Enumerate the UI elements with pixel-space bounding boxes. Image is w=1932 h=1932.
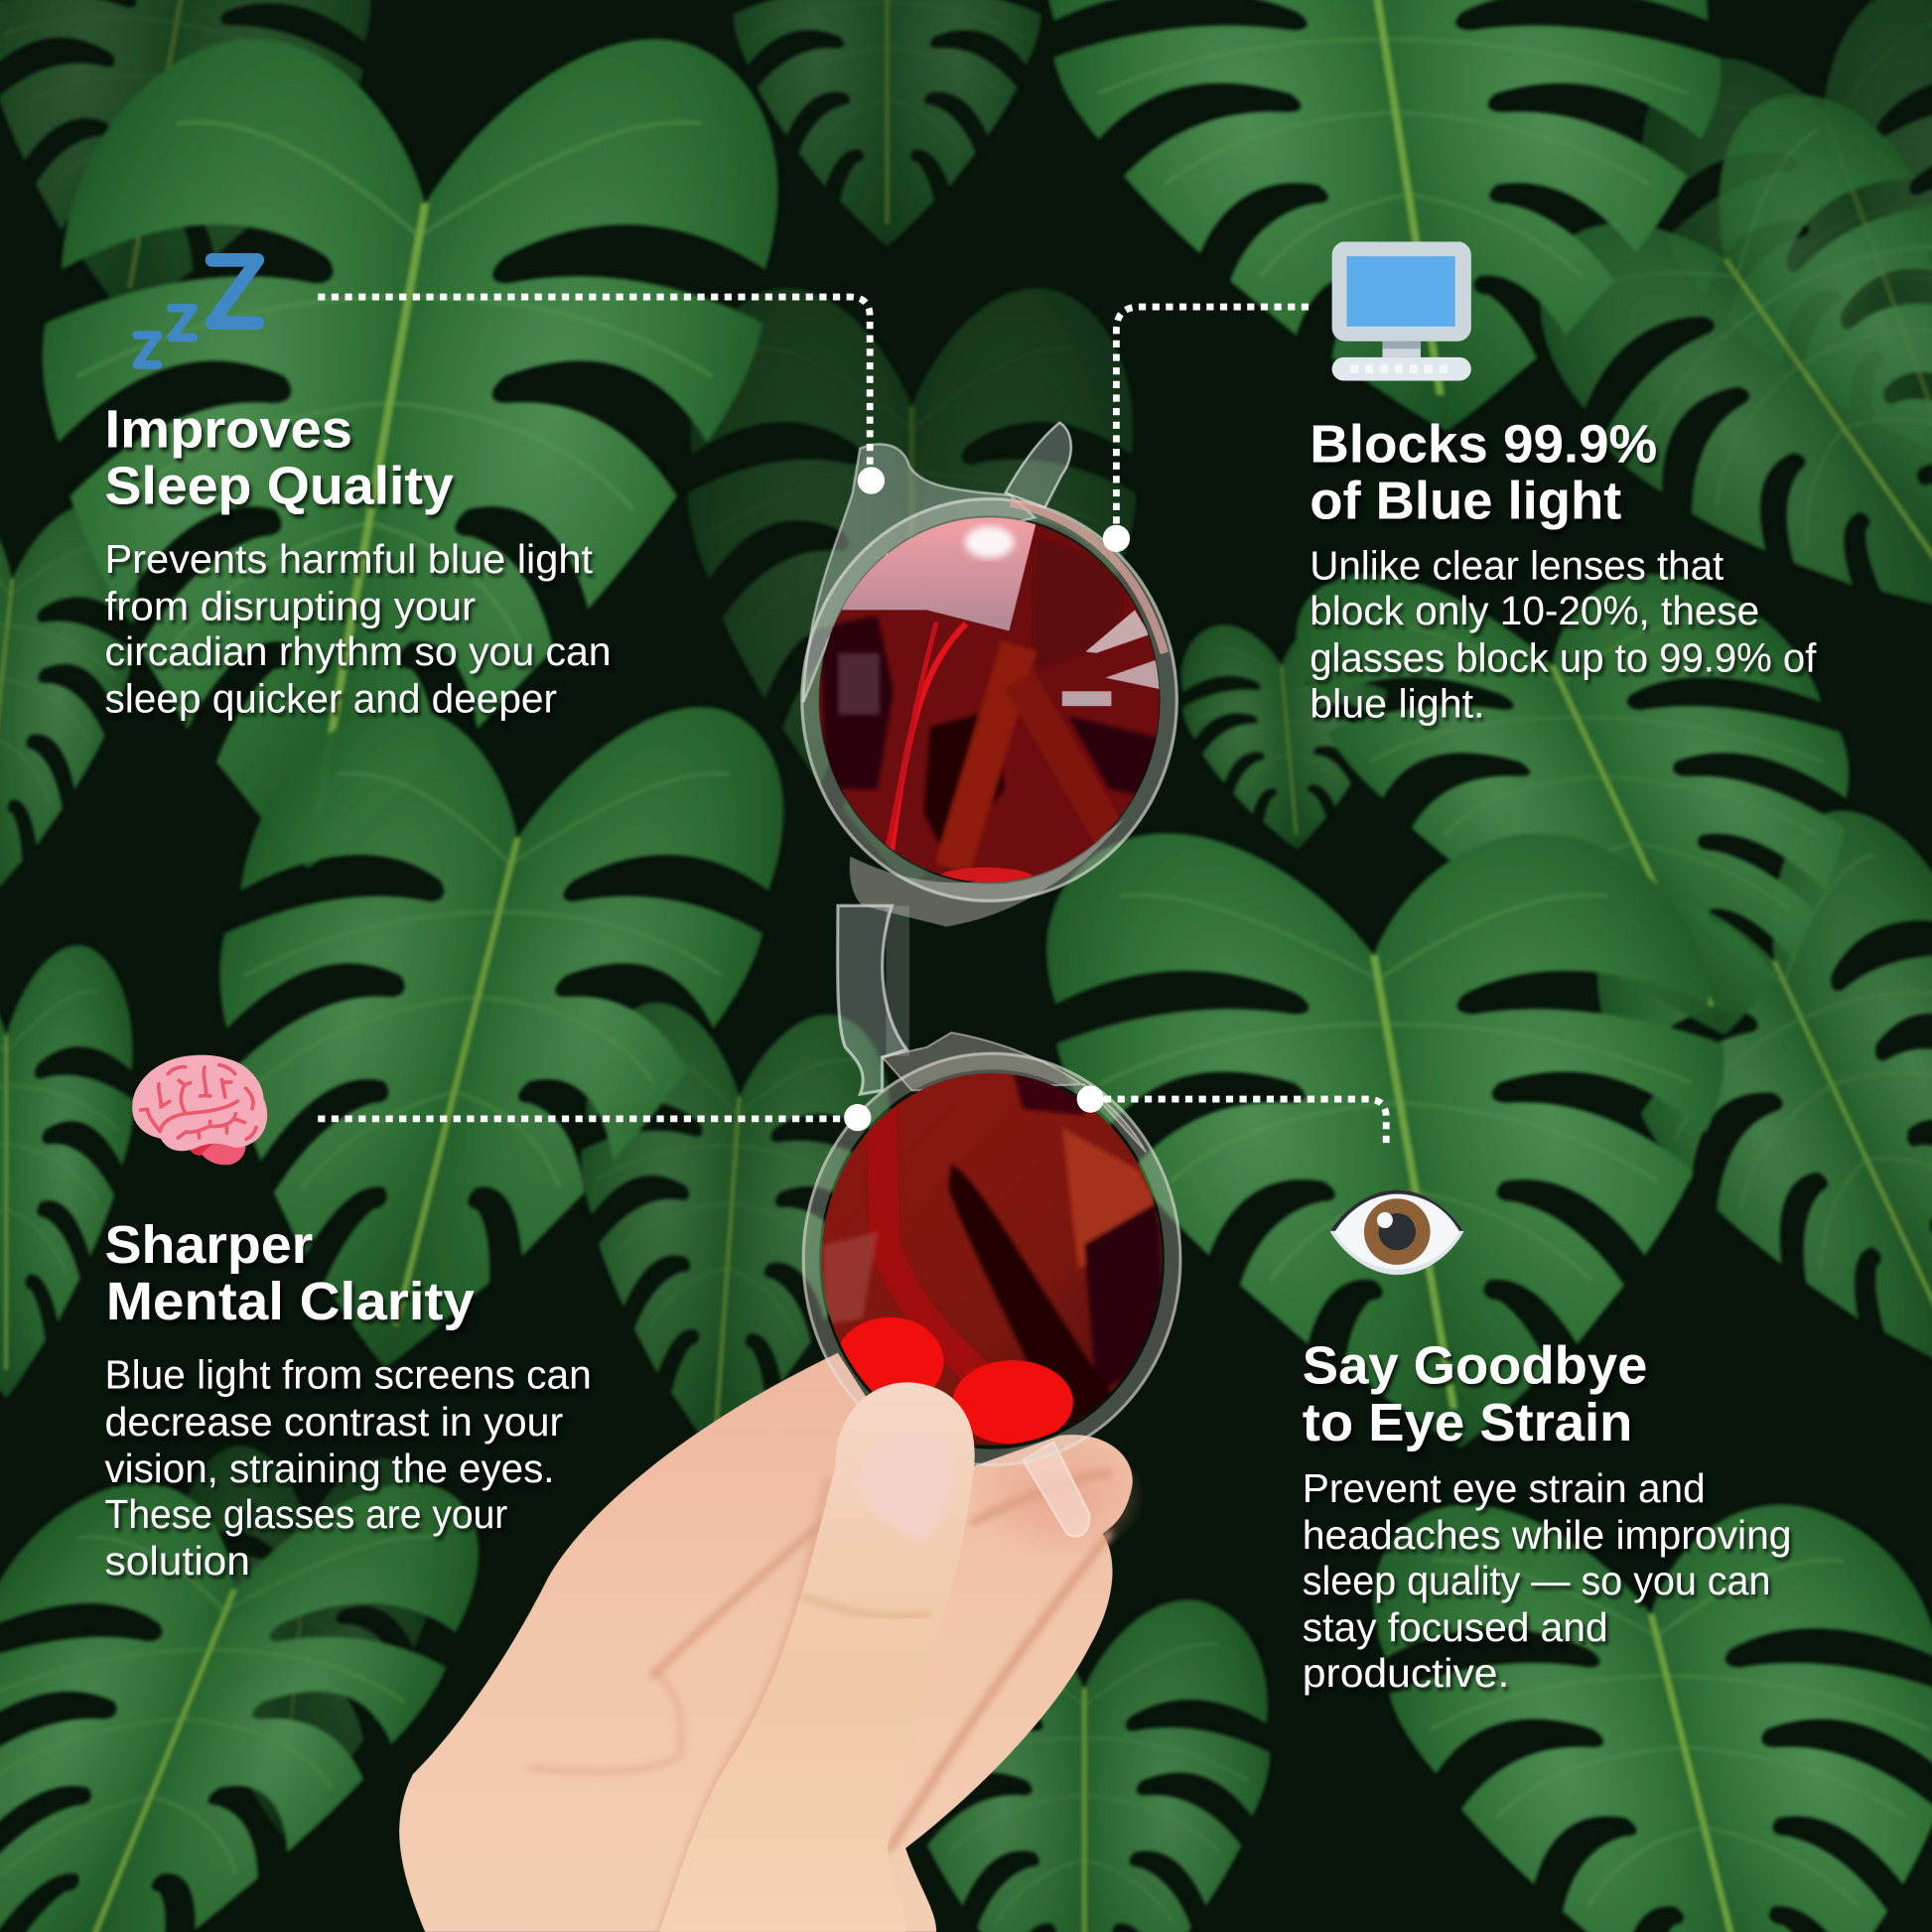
heading: sharper mental clarity: Sharper bbox=[104, 1216, 313, 1275]
body: mental clarity description bbox=[104, 1352, 592, 1584]
body: blue light description: glasses block up to 99.9% of bbox=[1310, 634, 1817, 680]
text block: blocks blue light bbox=[1310, 415, 1817, 726]
upper temple arm tip bbox=[1006, 423, 1071, 507]
heading: improves sleep quality bbox=[104, 401, 454, 516]
icon: sleeping zzz bbox=[137, 260, 257, 364]
body: sleep quality description: from disrupting your bbox=[104, 583, 476, 628]
glasses: upper lens bbox=[802, 444, 1176, 926]
body: eye strain description: Prevent eye strain and bbox=[1303, 1465, 1706, 1511]
connector dots bbox=[844, 467, 1130, 1131]
body: blue light description: Unlike clear lenses that bbox=[1310, 542, 1725, 588]
text block: improves sleep quality bbox=[104, 401, 612, 721]
body: mental clarity description: These glasses are your bbox=[104, 1491, 507, 1537]
connector: brain to frame bbox=[318, 1116, 858, 1122]
body: mental clarity description: Blue light from screens can bbox=[104, 1352, 592, 1398]
icon: computer monitor bbox=[1332, 241, 1471, 380]
body: sleep quality description: circadian rhythm so you can bbox=[104, 628, 612, 674]
body: sleep quality description: sleep quicker and deeper bbox=[104, 675, 557, 721]
glasses: lower lens bbox=[803, 1033, 1180, 1465]
heading: say goodbye to eye strain: to Eye Strain bbox=[1303, 1394, 1632, 1452]
body: eye strain description: stay focused and bbox=[1303, 1604, 1608, 1650]
body: mental clarity description: decrease contrast in your bbox=[104, 1399, 563, 1445]
body: sleep quality description bbox=[104, 536, 612, 721]
body: blue light description: blue light. bbox=[1310, 680, 1484, 726]
heading: say goodbye to eye strain bbox=[1303, 1337, 1647, 1452]
body: eye strain description: sleep quality — so you can bbox=[1303, 1558, 1770, 1603]
body: eye strain description: headaches while improving bbox=[1303, 1512, 1792, 1558]
icon: brain bbox=[132, 1055, 267, 1165]
body: mental clarity description: solution bbox=[104, 1538, 250, 1584]
text block: say goodbye to eye strain bbox=[1303, 1337, 1792, 1696]
body: sleep quality description: Prevents harmful blue light bbox=[104, 536, 594, 582]
body: eye strain description: productive. bbox=[1303, 1650, 1509, 1696]
heading: sharper mental clarity bbox=[104, 1216, 475, 1331]
body: blue light description: block only 10-20%, these bbox=[1310, 588, 1759, 633]
heading: blocks 99.9% of blue light bbox=[1310, 415, 1657, 530]
hand bbox=[399, 1353, 1146, 1932]
lower temple arm tip bbox=[1023, 1442, 1089, 1537]
connector: sleep to frame bbox=[318, 297, 870, 481]
connector: monitor to frame bbox=[1116, 307, 1309, 538]
heading: blocks 99.9% of blue light: of Blue light bbox=[1310, 472, 1621, 530]
connector: eye to frame bbox=[1090, 1099, 1386, 1146]
heading: improves sleep quality: Sleep Quality bbox=[104, 458, 454, 516]
heading: improves sleep quality: Improves bbox=[104, 401, 352, 460]
icon: eye bbox=[1330, 1189, 1463, 1275]
heading: sharper mental clarity: Mental Clarity bbox=[106, 1273, 475, 1331]
text block: sharper mental clarity bbox=[104, 1216, 592, 1584]
body: eye strain description bbox=[1303, 1465, 1792, 1696]
thumb bbox=[659, 1382, 975, 1932]
body: mental clarity description: vision, straining the eyes. bbox=[104, 1446, 554, 1491]
body: blue light description bbox=[1310, 542, 1817, 726]
heading: say goodbye to eye strain: Say Goodbye bbox=[1303, 1337, 1647, 1396]
glasses: bridge bbox=[838, 905, 909, 1094]
heading: blocks 99.9% of blue light: Blocks 99.9% bbox=[1310, 415, 1657, 474]
